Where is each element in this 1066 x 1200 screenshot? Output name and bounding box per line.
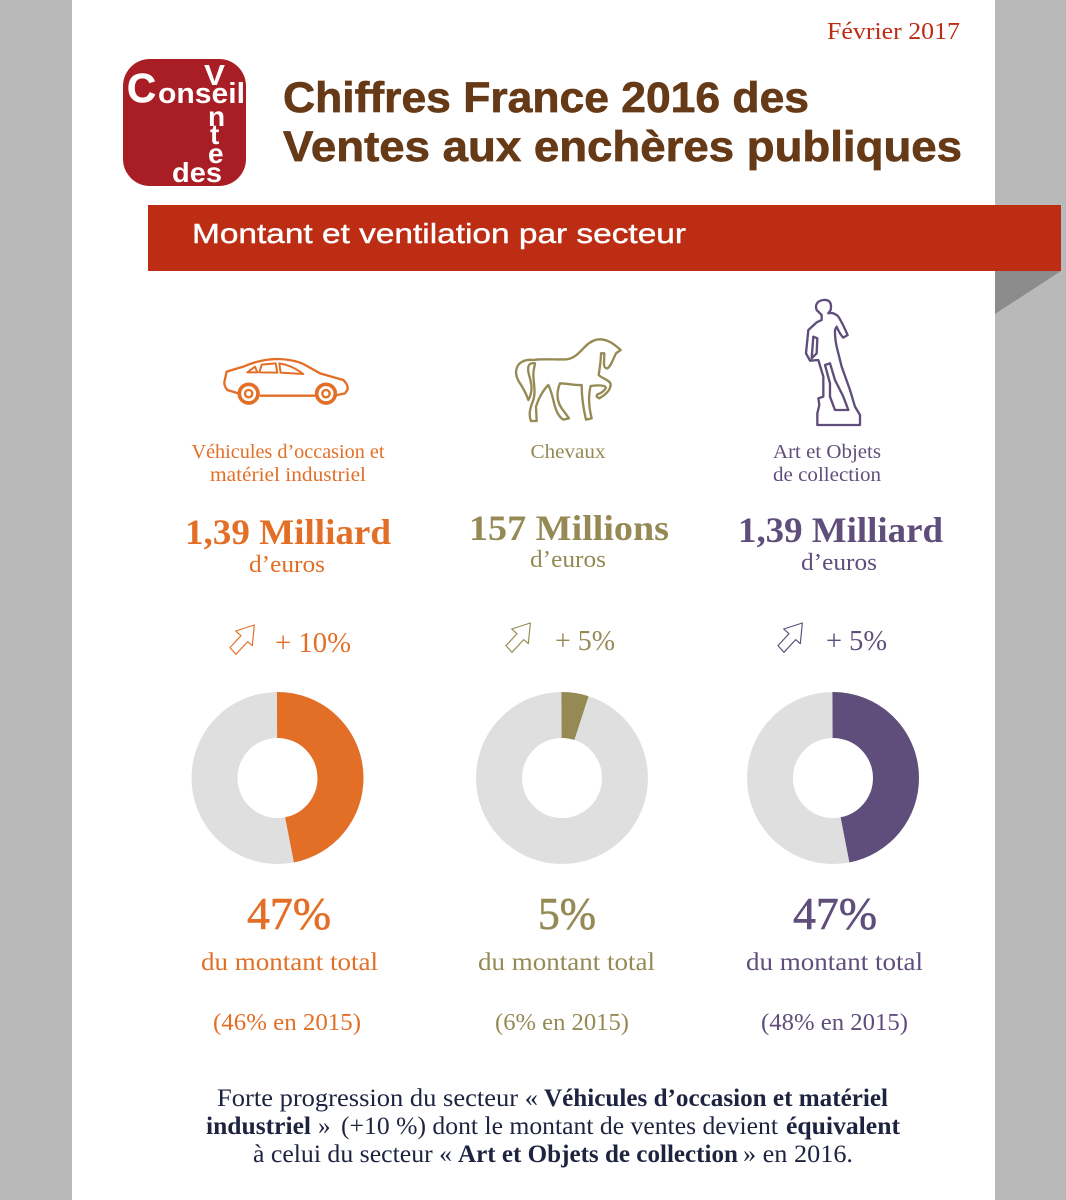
- amount: 1,39 Milliard: [185, 512, 391, 552]
- logo: Conseil des Ventes: t: [210, 119, 219, 150]
- banner: section heading: Montant et ventilation par secteur: [192, 218, 686, 249]
- title: Ventes aux enchères publiques: [283, 123, 962, 171]
- amount: 157 Millions: [469, 508, 669, 548]
- conclusion text: (+10 %) dont le montant de ventes devient: [341, 1113, 778, 1140]
- conclusion text: à celui du secteur «: [253, 1141, 452, 1168]
- growth: + 5%: [555, 626, 615, 657]
- growth: + 5%: [826, 626, 887, 657]
- sector label: de collection: [773, 465, 881, 486]
- growth: + 10%: [275, 628, 351, 659]
- donut chart: [499, 715, 625, 841]
- conclusion text: Forte progression du secteur «: [217, 1085, 538, 1112]
- logo: Conseil des Ventes: V: [204, 60, 226, 92]
- logo: Conseil des Ventes: C: [127, 65, 156, 111]
- share: 5%: [538, 888, 596, 939]
- logo: Conseil des Ventes: des: [172, 157, 222, 188]
- share: 47%: [247, 888, 331, 939]
- sector label: Chevaux: [530, 442, 606, 463]
- share: 47%: [793, 888, 877, 939]
- amount: d’euros: [530, 547, 606, 573]
- previous year: (48% en 2015): [761, 1010, 908, 1036]
- icon: horse: [516, 339, 621, 421]
- previous year: (46% en 2015): [213, 1010, 361, 1036]
- conclusion text: Véhicules d’occasion et matériel: [544, 1085, 888, 1112]
- logo: Conseil des Ventes: onseil: [158, 78, 245, 110]
- donut chart: [770, 715, 896, 841]
- conclusion text: industriel: [206, 1113, 311, 1140]
- icon: up arrow: [230, 625, 254, 654]
- previous year: (6% en 2015): [495, 1010, 629, 1036]
- banner fold: [995, 271, 1061, 314]
- title: Chiffres France 2016 des: [283, 74, 809, 122]
- panel: art et objets: [738, 300, 943, 1036]
- panel: chevaux: [469, 339, 669, 1036]
- amount: d’euros: [249, 552, 325, 578]
- sector label: matériel industriel: [210, 465, 367, 486]
- logo: Conseil des Ventes: n: [208, 101, 225, 132]
- icon: up arrow: [506, 623, 530, 652]
- icon: up arrow: [778, 623, 802, 652]
- amount: 1,39 Milliard: [738, 510, 943, 550]
- banner: section heading: [148, 205, 1061, 271]
- amount: [469, 508, 669, 573]
- share caption: du montant total: [746, 949, 923, 976]
- logo: Conseil des Ventes: e: [208, 138, 224, 169]
- amount: [738, 510, 943, 576]
- title: [283, 74, 962, 171]
- icon: statue: [806, 300, 860, 425]
- amount: [185, 512, 391, 578]
- sector label: Véhicules d’occasion et: [192, 442, 385, 463]
- conclusion text: équivalent: [786, 1113, 901, 1140]
- logo: Conseil des Ventes: [123, 59, 246, 188]
- date: Février 2017: [827, 19, 960, 45]
- conclusion text: Art et Objets de collection: [458, 1141, 738, 1168]
- conclusion text: »: [318, 1113, 330, 1140]
- sector label: Art et Objets: [773, 442, 881, 463]
- amount: d’euros: [801, 550, 877, 576]
- panel: véhicules: [185, 359, 391, 1036]
- share caption: du montant total: [478, 949, 655, 976]
- icon: car: [224, 359, 348, 403]
- sector label: [773, 442, 881, 486]
- sector label: [192, 442, 385, 486]
- conclusion text: [206, 1085, 901, 1168]
- donut chart: [214, 715, 340, 841]
- conclusion text: » en 2016.: [743, 1141, 853, 1168]
- share caption: du montant total: [201, 949, 378, 976]
